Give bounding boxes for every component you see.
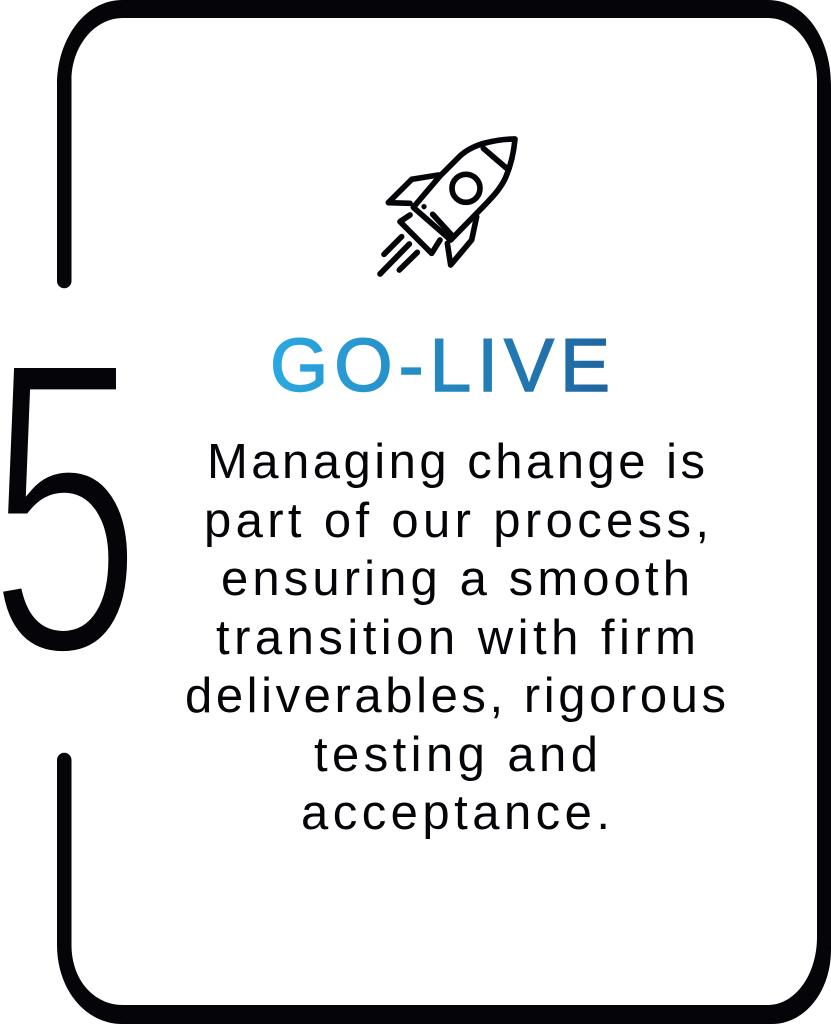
description text block: deliverables, rigorous [185,669,726,723]
description text block [185,435,726,840]
description text block: acceptance. [301,786,610,840]
description text block: testing and [314,728,598,782]
icon: rocket [380,139,515,274]
description text block: Managing change is [207,435,705,489]
description text block: ensuring a smooth [221,552,690,606]
description text block: part of our process, [204,494,709,548]
description text block: transition with firm [216,611,696,665]
heading: GO-LIVE: GO-LIVE [270,323,610,407]
